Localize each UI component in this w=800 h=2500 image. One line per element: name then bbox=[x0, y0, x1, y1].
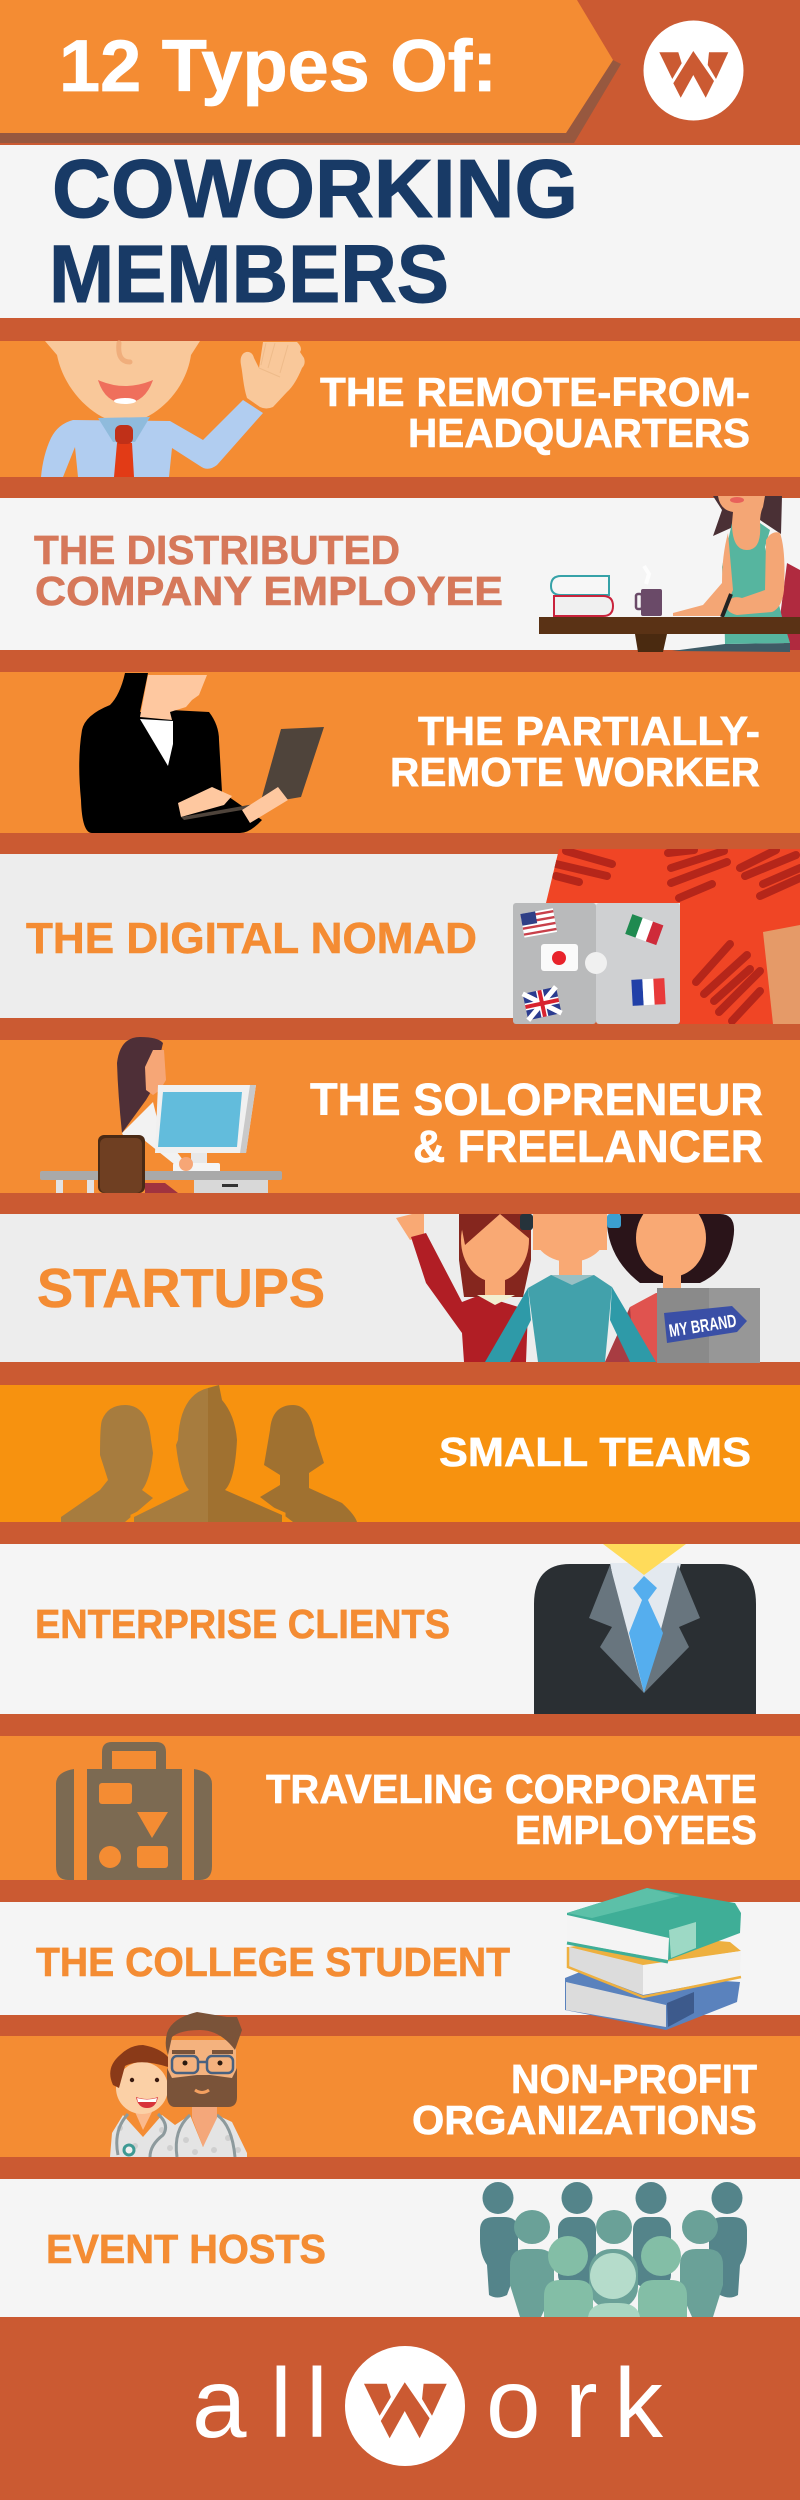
heading bbox=[412, 2056, 757, 2143]
heading: COMPANY EMPLOYEE bbox=[35, 568, 503, 614]
icon: Japan flag bbox=[541, 944, 578, 971]
icon: woman at computer bbox=[40, 1037, 282, 1193]
icon: suitcase bbox=[56, 1742, 212, 1880]
panel: traveling corporate employees bbox=[0, 1736, 800, 1880]
title panel: coworking members: COWORKING bbox=[52, 142, 578, 235]
heading: ORGANIZATIONS bbox=[412, 2097, 757, 2143]
heading bbox=[34, 527, 503, 614]
icon: my brand board: MY BRAND bbox=[667, 1311, 738, 1341]
icon: waving man bbox=[41, 341, 305, 477]
icon: team silhouettes bbox=[61, 1385, 357, 1530]
heading bbox=[390, 708, 760, 795]
heading bbox=[320, 369, 750, 456]
footer: allwork logo: ork bbox=[486, 2348, 664, 2458]
title panel: coworking members: MEMBERS bbox=[49, 229, 449, 320]
panel: event hosts bbox=[0, 2179, 800, 2317]
heading: ENTERPRISE CLIENTS bbox=[35, 1601, 450, 1647]
heading: THE PARTIALLY- bbox=[418, 708, 760, 754]
heading: & FREELANCER bbox=[413, 1121, 763, 1172]
heading: THE REMOTE-FROM- bbox=[320, 369, 750, 415]
icon: woman with laptop bbox=[79, 673, 324, 833]
heading: STARTUPS bbox=[37, 1257, 325, 1319]
panel: partially remote worker bbox=[0, 672, 800, 833]
heading bbox=[310, 1074, 763, 1172]
heading: EMPLOYEES bbox=[515, 1807, 757, 1853]
panel: digital nomad bbox=[0, 849, 800, 1024]
heading: REMOTE WORKER bbox=[390, 749, 760, 795]
header banner bbox=[0, 0, 744, 143]
footer: allwork logo bbox=[192, 2346, 664, 2466]
title panel: coworking members bbox=[0, 142, 800, 320]
icon: USA flag bbox=[520, 908, 557, 938]
heading: NON-PROFIT bbox=[511, 2056, 757, 2102]
heading: THE SOLOPRENEUR bbox=[310, 1074, 763, 1125]
footer: allwork logo: all bbox=[192, 2348, 328, 2458]
icon: doctor and child bbox=[110, 2012, 247, 2157]
panel: startups bbox=[0, 1198, 800, 1363]
panel: remote from headquarters bbox=[0, 341, 800, 477]
icon: three founders with brand board bbox=[396, 1198, 734, 1362]
heading: THE DIGITAL NOMAD bbox=[26, 914, 477, 963]
heading: THE COLLEGE STUDENT bbox=[36, 1939, 510, 1985]
panel: distributed company employee bbox=[0, 496, 800, 652]
icon: Mexico flag bbox=[625, 914, 663, 945]
heading: HEADQUARTERS bbox=[408, 410, 750, 456]
icon: allwork logo badge bbox=[644, 20, 744, 120]
icon: traveller with stickered laptop bbox=[513, 849, 800, 1024]
panel: solopreneur and freelancer bbox=[0, 1037, 800, 1193]
icon: woman at desk bbox=[539, 496, 800, 652]
icon: France flag bbox=[631, 978, 666, 1006]
icon: business suit bbox=[534, 1544, 756, 1714]
heading: 12 Types Of: 12 Types Of: bbox=[59, 26, 497, 107]
heading: SMALL TEAMS bbox=[439, 1429, 751, 1475]
heading: THE DISTRIBUTED bbox=[34, 527, 400, 573]
icon: my brand board bbox=[657, 1288, 760, 1363]
heading bbox=[266, 1766, 757, 1853]
heading: TRAVELING CORPORATE bbox=[266, 1766, 757, 1812]
heading: EVENT HOSTS bbox=[46, 2226, 326, 2272]
panel: enterprise clients bbox=[0, 1544, 800, 1714]
icon: stack of books bbox=[565, 1888, 741, 2030]
panel: non-profit organizations bbox=[0, 2012, 800, 2157]
panel: small teams bbox=[0, 1385, 800, 1530]
panel: college student bbox=[0, 1888, 800, 2030]
icon: crowd of people bbox=[480, 2182, 747, 2317]
icon: UK flag bbox=[523, 987, 562, 1020]
